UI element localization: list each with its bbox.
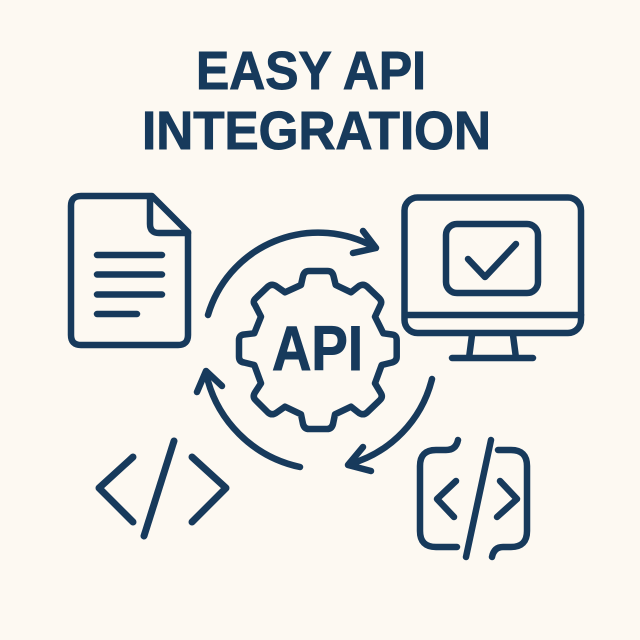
icon: gear with API label — [239, 271, 397, 429]
icon: gear with API label: API — [272, 314, 363, 384]
title: INTEGRATION — [142, 101, 491, 161]
icon: monitor with check mark — [404, 198, 581, 358]
title: EASY API — [196, 41, 426, 101]
arrow: left, code to document — [197, 371, 300, 467]
arrow: top, document to monitor — [208, 231, 376, 315]
icon: code in rounded frame — [420, 440, 527, 557]
icon: document — [71, 196, 188, 345]
icon: code brackets — [99, 441, 226, 536]
arrow: right, monitor to code — [348, 379, 432, 471]
title — [142, 41, 491, 161]
